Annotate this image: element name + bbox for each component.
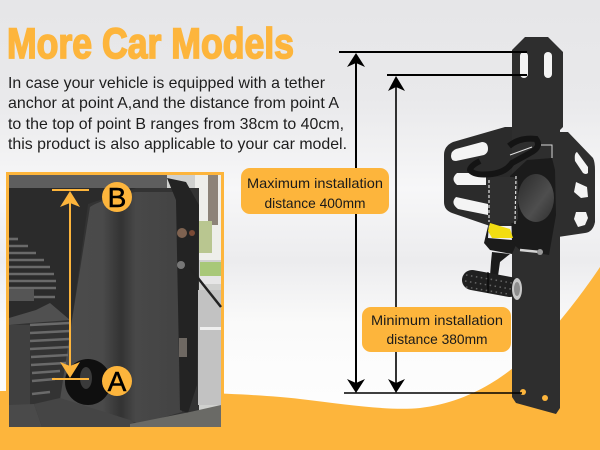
photo frame: [6, 172, 224, 427]
bed rail: [9, 175, 167, 188]
bottom holes: [520, 389, 526, 395]
bottom reference line: [344, 392, 522, 394]
photo panel: truck bed with points A and B: [6, 172, 224, 427]
description text: anchor at point A,and the distance from point A: [8, 95, 339, 112]
minimum installation dimension arrow: [387, 75, 527, 393]
callout: maximum installation distance: distance 400mm: [264, 195, 366, 211]
strap spool: [488, 177, 518, 223]
marker A: A: [108, 366, 127, 397]
wheel well ribs: [9, 239, 70, 394]
callout: maximum installation distance: Maximum installation: [247, 175, 383, 191]
top slots: [520, 52, 528, 78]
wing slots right: [575, 152, 588, 174]
distance arrow between A and B: [52, 190, 89, 379]
inner bed wall: [9, 188, 199, 427]
silver angle bracket: [541, 145, 552, 158]
anchor hole: [65, 359, 111, 405]
callout: minimum installation distance: Minimum installation: [371, 312, 503, 328]
ratchet arm: [490, 252, 510, 276]
left wing plate: [444, 127, 514, 226]
marker A: [102, 366, 132, 397]
outside scene: [9, 175, 221, 427]
callout: maximum installation distance: [241, 168, 389, 214]
road: [198, 290, 221, 405]
orange wave background: [0, 267, 600, 450]
truck bed photo: [9, 175, 221, 427]
description text: this product is also applicable to your car model.: [8, 136, 347, 153]
callout: minimum installation distance: distance 380mm: [386, 331, 488, 347]
callout: minimum installation distance: [362, 307, 511, 352]
maximum installation dimension arrow: [339, 52, 527, 393]
ratchet bracket: [510, 158, 556, 255]
ratchet silver details: [520, 250, 540, 252]
wing slots left: [451, 142, 488, 161]
handle grip: [465, 272, 522, 300]
product: tether bracket: [444, 37, 595, 414]
door post: [167, 178, 199, 413]
ratchet knob: [518, 174, 554, 222]
main vertical plate: [512, 37, 563, 414]
carabiner hook: [470, 139, 538, 174]
title: More Car Models: [7, 20, 294, 68]
marker B: B: [108, 182, 126, 213]
tailgate strut: [190, 268, 221, 307]
right wing plate: [558, 132, 595, 237]
marker B: [102, 182, 132, 213]
description text: [8, 75, 347, 153]
description text: to the top of point B ranges from 38cm to 40cm,: [8, 116, 344, 133]
description text: In case your vehicle is equipped with a tether: [8, 75, 326, 92]
hinge bolts: [177, 228, 187, 238]
ratchet frame lower: [484, 222, 516, 254]
bed floor: [9, 404, 42, 427]
yellow strap tab: [488, 223, 513, 238]
